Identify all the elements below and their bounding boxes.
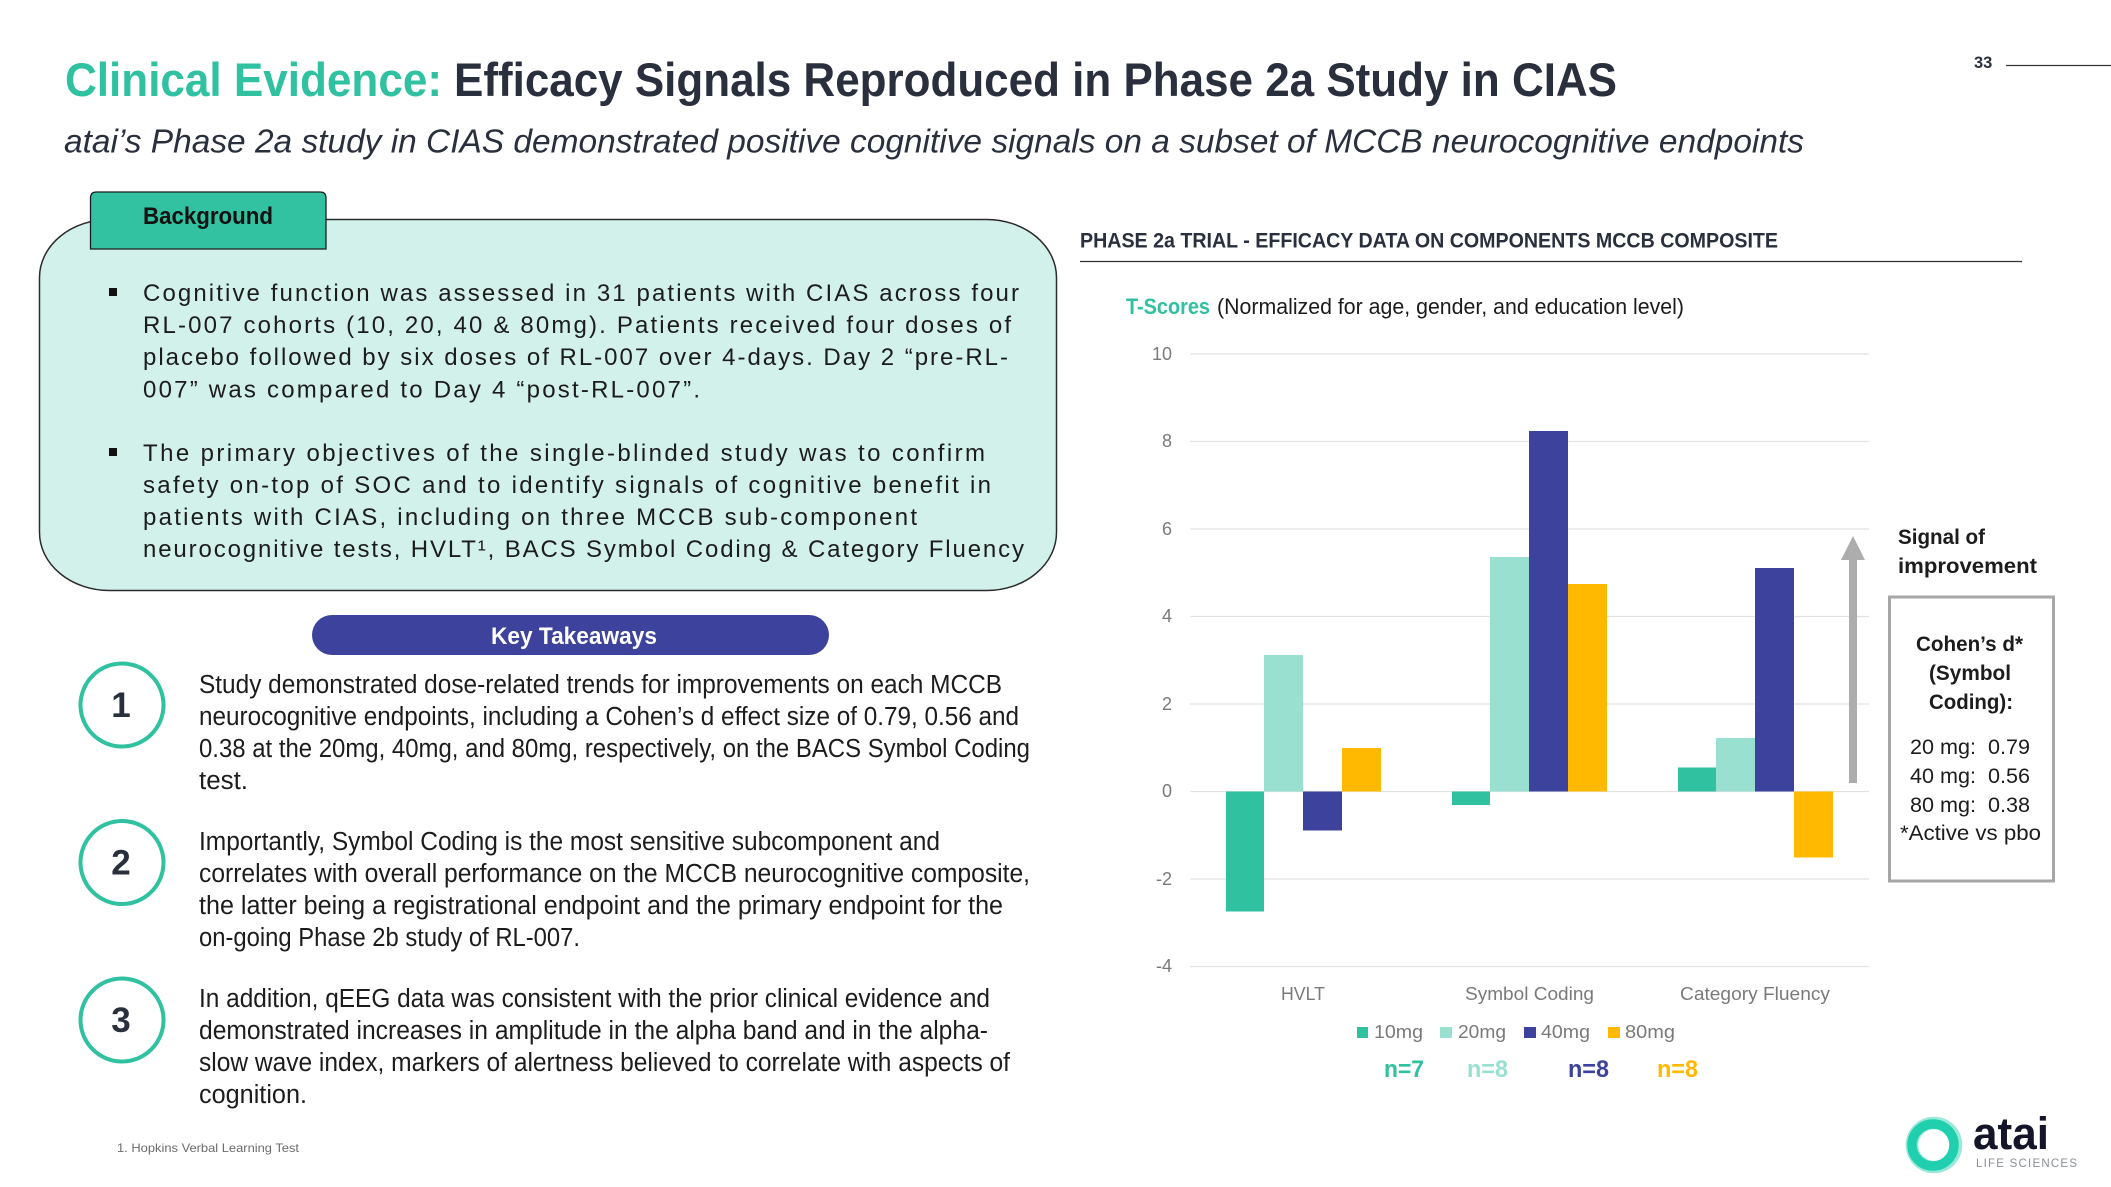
callout: Cohen's d: Cohen’s d* (1916, 633, 2024, 656)
signal of improvement label: improvement (1898, 555, 2037, 578)
category labels: HVLT (1281, 984, 1325, 1004)
bars: Category Fluency (1678, 568, 1833, 858)
takeaway text 2: Importantly, Symbol Coding is the most sensitive subcomponent and (199, 828, 940, 856)
y axis gridlines and labels: -2 (1156, 869, 1172, 889)
y axis gridlines and labels: 4 (1162, 606, 1172, 626)
title: Efficacy Signals Reproduced in Phase 2a Study in CIAS (454, 53, 1617, 106)
footnote: 1. Hopkins Verbal Learning Test (117, 1141, 300, 1155)
bullet one: Cognitive function was assessed in 31 patients with CIAS across four (143, 280, 1019, 307)
takeaway text 1 (199, 671, 1030, 795)
bars: Symbol Coding (1452, 431, 1607, 805)
logo: atai life sciences (1912, 1108, 2077, 1170)
takeaway text 1: test. (199, 767, 248, 795)
sample sizes: n=7 (1384, 1056, 1424, 1083)
chart subtitle: (Normalized for age, gender, and education level) (1217, 294, 1684, 319)
category labels (1281, 984, 1830, 1004)
callout: Cohen's d: (Symbol (1929, 662, 2011, 685)
bullet two (109, 440, 1024, 563)
takeaway text 3: demonstrated increases in amplitude in the alpha band and in the alpha- (199, 1017, 988, 1045)
logo: atai life sciences: atai (1973, 1108, 2049, 1159)
chart heading: PHASE 2a TRIAL - EFFICACY DATA ON COMPONENTS MCCB COMPOSITE (1080, 228, 1778, 252)
bar chart (1152, 344, 1869, 1083)
logo ring (1912, 1123, 1956, 1167)
bullet one: 007” was compared to Day 4 “post-RL-007”. (143, 376, 700, 404)
takeaway text 2 (199, 828, 1030, 952)
number badge 1: 1 (111, 686, 131, 725)
bullet one: placebo followed by six doses of RL-007 over 4-days. Day 2 “pre-RL- (143, 344, 1008, 371)
takeaway 2 (80, 821, 1030, 952)
bullet two: neurocognitive tests, HVLT¹, BACS Symbol Coding & Category Fluency (143, 536, 1024, 563)
sample sizes: n=8 (1657, 1056, 1698, 1083)
key takeaways pill (312, 615, 829, 655)
legend: 40mg (1541, 1022, 1590, 1042)
sample sizes (1384, 1056, 1698, 1083)
sample sizes: n=8 (1568, 1056, 1609, 1083)
takeaway text 2: on-going Phase 2b study of RL-007. (199, 924, 580, 952)
page number (1974, 54, 2111, 72)
callout: Cohen's d: 40 mg: 0.56 (1910, 765, 2030, 788)
takeaway text 1: neurocognitive endpoints, including a Cohen’s d effect size of 0.79, 0.56 and (199, 703, 1019, 731)
callout: Cohen's d: 80 mg: 0.38 (1910, 794, 2030, 817)
legend: 20mg (1458, 1022, 1506, 1042)
page number: 33 (1974, 54, 1992, 72)
number badge 2: 2 (111, 844, 131, 882)
panel: background (40, 192, 1056, 590)
takeaway text 3: In addition, qEEG data was consistent with the prior clinical evidence and (199, 985, 990, 1013)
logo: atai life sciences: LIFE SCIENCES (1976, 1158, 2077, 1170)
bars: HVLT (1226, 655, 1381, 912)
legend: 80mg (1625, 1022, 1675, 1042)
background tab: Background (143, 203, 273, 230)
bullet two: patients with CIAS, including on three MCCB sub-component (143, 504, 917, 531)
subtitle: atai’s Phase 2a study in CIAS demonstrated positive cognitive signals on a subset of MCCB neurocognitive endpoints (64, 122, 1804, 160)
sample sizes: n=8 (1467, 1056, 1508, 1083)
number badge 3: 3 (111, 1001, 131, 1040)
takeaway text 1: Study demonstrated dose-related trends for improvements on each MCCB (199, 671, 1002, 699)
takeaway text 2: correlates with overall performance on the MCCB neurocognitive composite, (199, 860, 1030, 888)
number badge 1 (80, 664, 164, 746)
callout: Cohen's d: *Active vs pbo (1900, 822, 2041, 845)
y axis gridlines and labels: 10 (1152, 344, 1172, 364)
bullet two: safety on-top of SOC and to identify signals of cognitive benefit in (143, 472, 991, 499)
callout: Cohen's d: 20 mg: 0.79 (1910, 736, 2030, 759)
number badge 2 (80, 821, 164, 904)
takeaway 1 (80, 664, 1030, 795)
arrow: signal of improvement (1841, 536, 1865, 783)
number badge 3 (80, 978, 164, 1062)
panel body (40, 220, 1056, 590)
y axis gridlines and labels: -4 (1156, 956, 1172, 976)
legend: 10mg (1374, 1022, 1423, 1042)
bullet two: The primary objectives of the single-blinded study was to confirm (143, 440, 985, 467)
chart subtitle: T-Scores (1126, 294, 1210, 319)
key takeaways pill: Key Takeaways (491, 623, 657, 650)
signal of improvement label: Signal of (1898, 526, 1986, 549)
callout: Cohen's d (1890, 597, 2054, 881)
y axis gridlines and labels: 8 (1162, 431, 1172, 451)
takeaway text 3: cognition. (199, 1081, 307, 1109)
legend (1357, 1022, 1675, 1042)
bullet one (109, 280, 1019, 404)
takeaway text 3: slow wave index, markers of alertness believed to correlate with aspects of (199, 1049, 1011, 1077)
y axis gridlines and labels (1152, 344, 1869, 976)
y axis gridlines and labels: 0 (1162, 781, 1172, 801)
y axis gridlines and labels: 6 (1162, 519, 1172, 539)
category labels: Category Fluency (1680, 984, 1830, 1004)
background tab (90, 192, 326, 249)
category labels: Symbol Coding (1465, 984, 1594, 1004)
takeaway 3 (80, 978, 1011, 1109)
y axis gridlines and labels: 2 (1162, 694, 1172, 714)
takeaway text 1: 0.38 at the 20mg, 40mg, and 80mg, respectively, on the BACS Symbol Coding (199, 735, 1030, 763)
bullet one: RL-007 cohorts (10, 20, 40 & 80mg). Patients received four doses of (143, 312, 1011, 339)
title: Clinical Evidence: (65, 53, 442, 106)
takeaway text 2: the latter being a registrational endpoint and the primary endpoint for the (199, 892, 1003, 920)
callout: Cohen's d: Coding): (1929, 691, 2013, 714)
signal of improvement label (1898, 526, 2037, 578)
takeaway text 3 (199, 985, 1011, 1109)
